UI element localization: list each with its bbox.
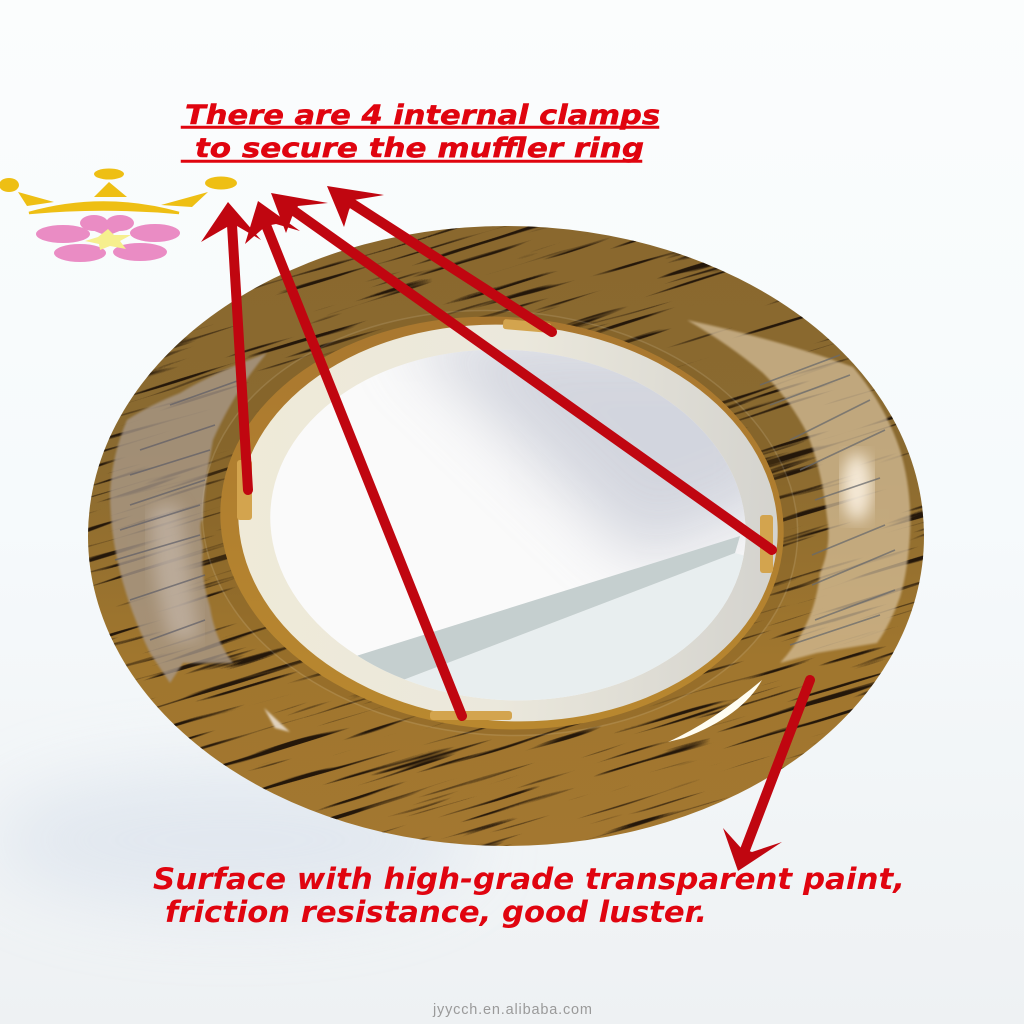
gloss: left bright band xyxy=(150,503,200,640)
wooden ring xyxy=(88,226,924,846)
shaded backdrop xyxy=(411,350,746,570)
arrow: clamp bottom xyxy=(245,201,462,716)
gloss: left highlight xyxy=(110,353,267,683)
ring body xyxy=(88,226,924,846)
wood grain xyxy=(88,226,924,846)
heading: clamps note: to secure the muffler ring xyxy=(195,133,644,164)
collar outer lip xyxy=(188,291,812,755)
gloss: right highlight xyxy=(687,320,910,663)
arrow: surface note xyxy=(723,680,810,871)
clamp tabs xyxy=(237,319,773,720)
background shadow xyxy=(0,770,470,910)
grey grain on right highlight xyxy=(760,355,895,645)
heading: clamps note xyxy=(181,100,660,164)
caption: surface note: friction resistance, good luster. xyxy=(165,895,707,929)
arrow: clamp left xyxy=(201,202,261,490)
amber inner collar xyxy=(206,298,798,748)
icon: crown xyxy=(0,168,237,213)
hollow centre xyxy=(258,334,758,716)
logo: crown and flower xyxy=(0,168,237,262)
tube band xyxy=(353,536,740,680)
grey grain on left highlight xyxy=(115,380,240,640)
watermark: jyycch.en.alibaba.com xyxy=(432,1002,592,1018)
caption: surface note xyxy=(153,862,905,929)
icon: flower xyxy=(36,215,180,262)
tube lower part xyxy=(405,553,744,700)
gloss: lower streak xyxy=(668,680,762,742)
caption: surface note: Surface with high-grade transparent paint, xyxy=(153,862,905,896)
arrow: clamp right xyxy=(271,193,772,550)
gloss: small lower-left spot xyxy=(264,708,290,732)
white inner ring xyxy=(225,307,791,739)
arrow: clamp top xyxy=(327,186,552,332)
tube seen through the hollow xyxy=(358,350,746,700)
gloss: right bright spot xyxy=(842,453,872,521)
heading: clamps note: There are 4 internal clamps xyxy=(185,100,660,131)
